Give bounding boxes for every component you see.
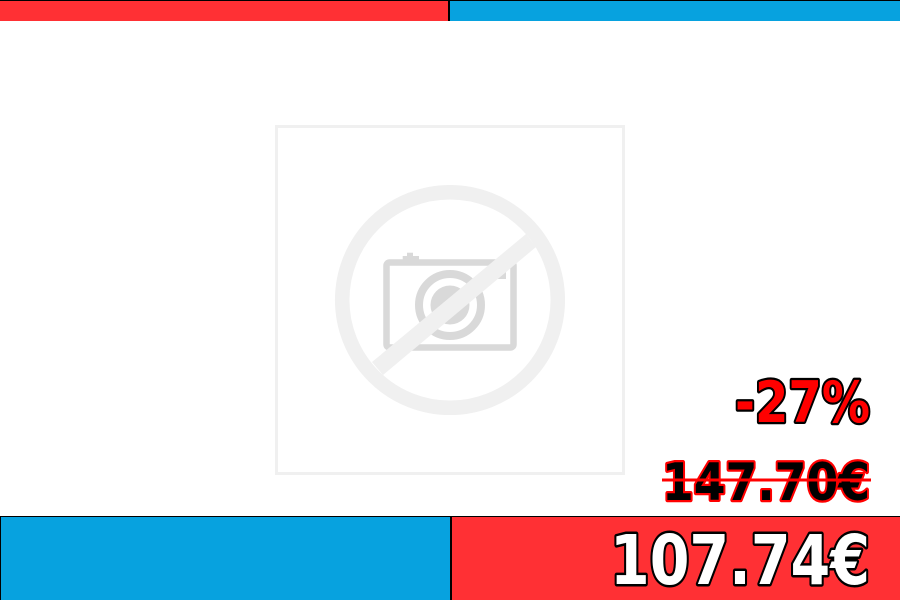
icon: prohibition sign xyxy=(342,192,558,408)
icon: camera xyxy=(386,253,514,348)
bottom bar xyxy=(0,516,900,600)
top bar xyxy=(0,0,900,21)
original price: 147.70€ xyxy=(662,453,870,513)
discount percentage: -27% xyxy=(735,370,870,436)
image placeholder xyxy=(276,126,624,474)
